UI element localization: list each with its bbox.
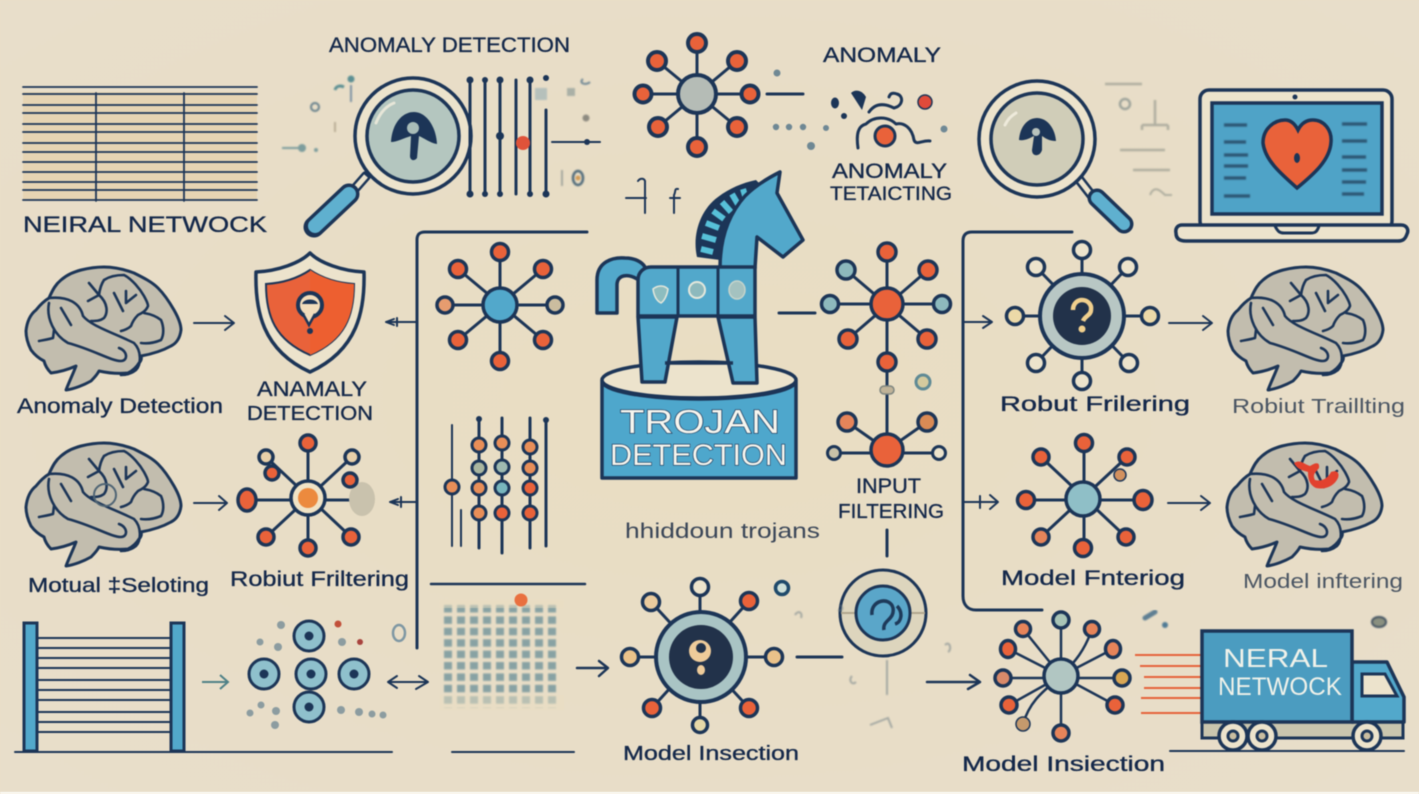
tick arrow (963, 495, 998, 509)
icon: circular scanner (840, 570, 926, 656)
icon: magnifying glass right (979, 81, 1124, 224)
arrow (194, 496, 227, 510)
label: input: INPUT (856, 475, 921, 498)
frame: right bracket (963, 232, 1072, 610)
icon: target circle cluster (246, 620, 405, 729)
icon: brain with red trojan (1227, 443, 1382, 566)
label: robiut filtering: Robiut Friltering (230, 568, 409, 591)
label: anomaly detection heading: ANOMALY DETECTION (329, 34, 570, 57)
heatmap grid (440, 594, 564, 710)
arrow (577, 661, 608, 676)
truck label: netwock: NETWOCK (1218, 673, 1342, 701)
divider above grid (431, 583, 585, 585)
connector dash and dots (767, 70, 948, 150)
double arrow (388, 676, 428, 689)
vertical signal lines (466, 75, 600, 198)
network: input filtering (828, 371, 946, 466)
chart: bead columns (445, 416, 549, 553)
icon: brain mid left (26, 443, 181, 566)
network: model filtering (1018, 434, 1152, 556)
network: top centre (634, 34, 758, 156)
label: hidden trojans: hhiddoun trojans (625, 520, 820, 543)
scattered marks around left magnifier (282, 76, 590, 186)
dash from horse to network (779, 312, 815, 314)
network: blue hub (437, 244, 563, 370)
faint marks around scanner (795, 605, 950, 728)
label: robut frilering: Robut Frilering (1000, 393, 1190, 416)
label: model fnteriog: Model Fnteriog (1001, 567, 1185, 590)
arrow (202, 675, 228, 689)
icon: magnifying glass left (314, 78, 471, 227)
title: detection: DETECTION (610, 439, 787, 472)
icon: fence (24, 623, 184, 751)
pedestal with trojan detection title (602, 362, 796, 478)
label: model inftering: Model inftering (1243, 571, 1403, 593)
label: tetaicting: TETAICTING (830, 184, 952, 205)
network: model inspection (622, 578, 788, 732)
icon: brain top left (26, 267, 181, 390)
icon: truck (1135, 631, 1404, 750)
label: detection: DETECTION (247, 403, 373, 425)
fragments above horse (626, 179, 680, 213)
neural network grid icon (23, 87, 257, 201)
icon: trojan horse (597, 172, 803, 383)
label: robut trailing: Robiut Traillting (1232, 396, 1405, 418)
arrow (194, 316, 234, 330)
label: anomaly tetaicting: ANOMALY (832, 160, 947, 183)
tick arrow (386, 318, 417, 326)
label: anamaly: ANAMALY (257, 378, 367, 401)
frame: left bracket (417, 232, 587, 648)
tick arrow (390, 497, 417, 507)
baseline strokes (15, 751, 1404, 752)
arrow (1169, 316, 1212, 330)
network: question hub (1006, 242, 1158, 390)
network: orange hub (822, 243, 950, 371)
small marks above truck (1145, 612, 1386, 628)
label: model selecting: Motual ‡Seloting (28, 575, 209, 597)
arrow (1168, 496, 1210, 510)
label: anomaly detection under brain: Anomaly Detection (17, 395, 223, 418)
title: trojan: TROJAN (620, 403, 780, 440)
network: robust filtering (238, 435, 375, 556)
faded marks by right magnifier (1105, 84, 1172, 195)
icon: brain top right (1228, 267, 1383, 390)
label: neural network: NEIRAL NETWOCK (23, 212, 267, 237)
label: filtering: FILTERING (838, 501, 944, 523)
speed lines (1135, 655, 1202, 713)
connector dash and vertical (797, 530, 887, 657)
label: model insection: Model Insection (623, 743, 799, 765)
label: anomaly top: ANOMALY (823, 44, 941, 67)
icon: anomaly cluster (831, 91, 932, 148)
truck label: neral: NERAL (1223, 643, 1328, 673)
icon: red shield (256, 253, 364, 372)
network: bottom (995, 612, 1130, 741)
icon: laptop with heart (1176, 90, 1408, 241)
tick arrow right frame (963, 316, 992, 328)
arrow (927, 675, 980, 689)
label: model insiection: Model Insiection (962, 753, 1165, 776)
